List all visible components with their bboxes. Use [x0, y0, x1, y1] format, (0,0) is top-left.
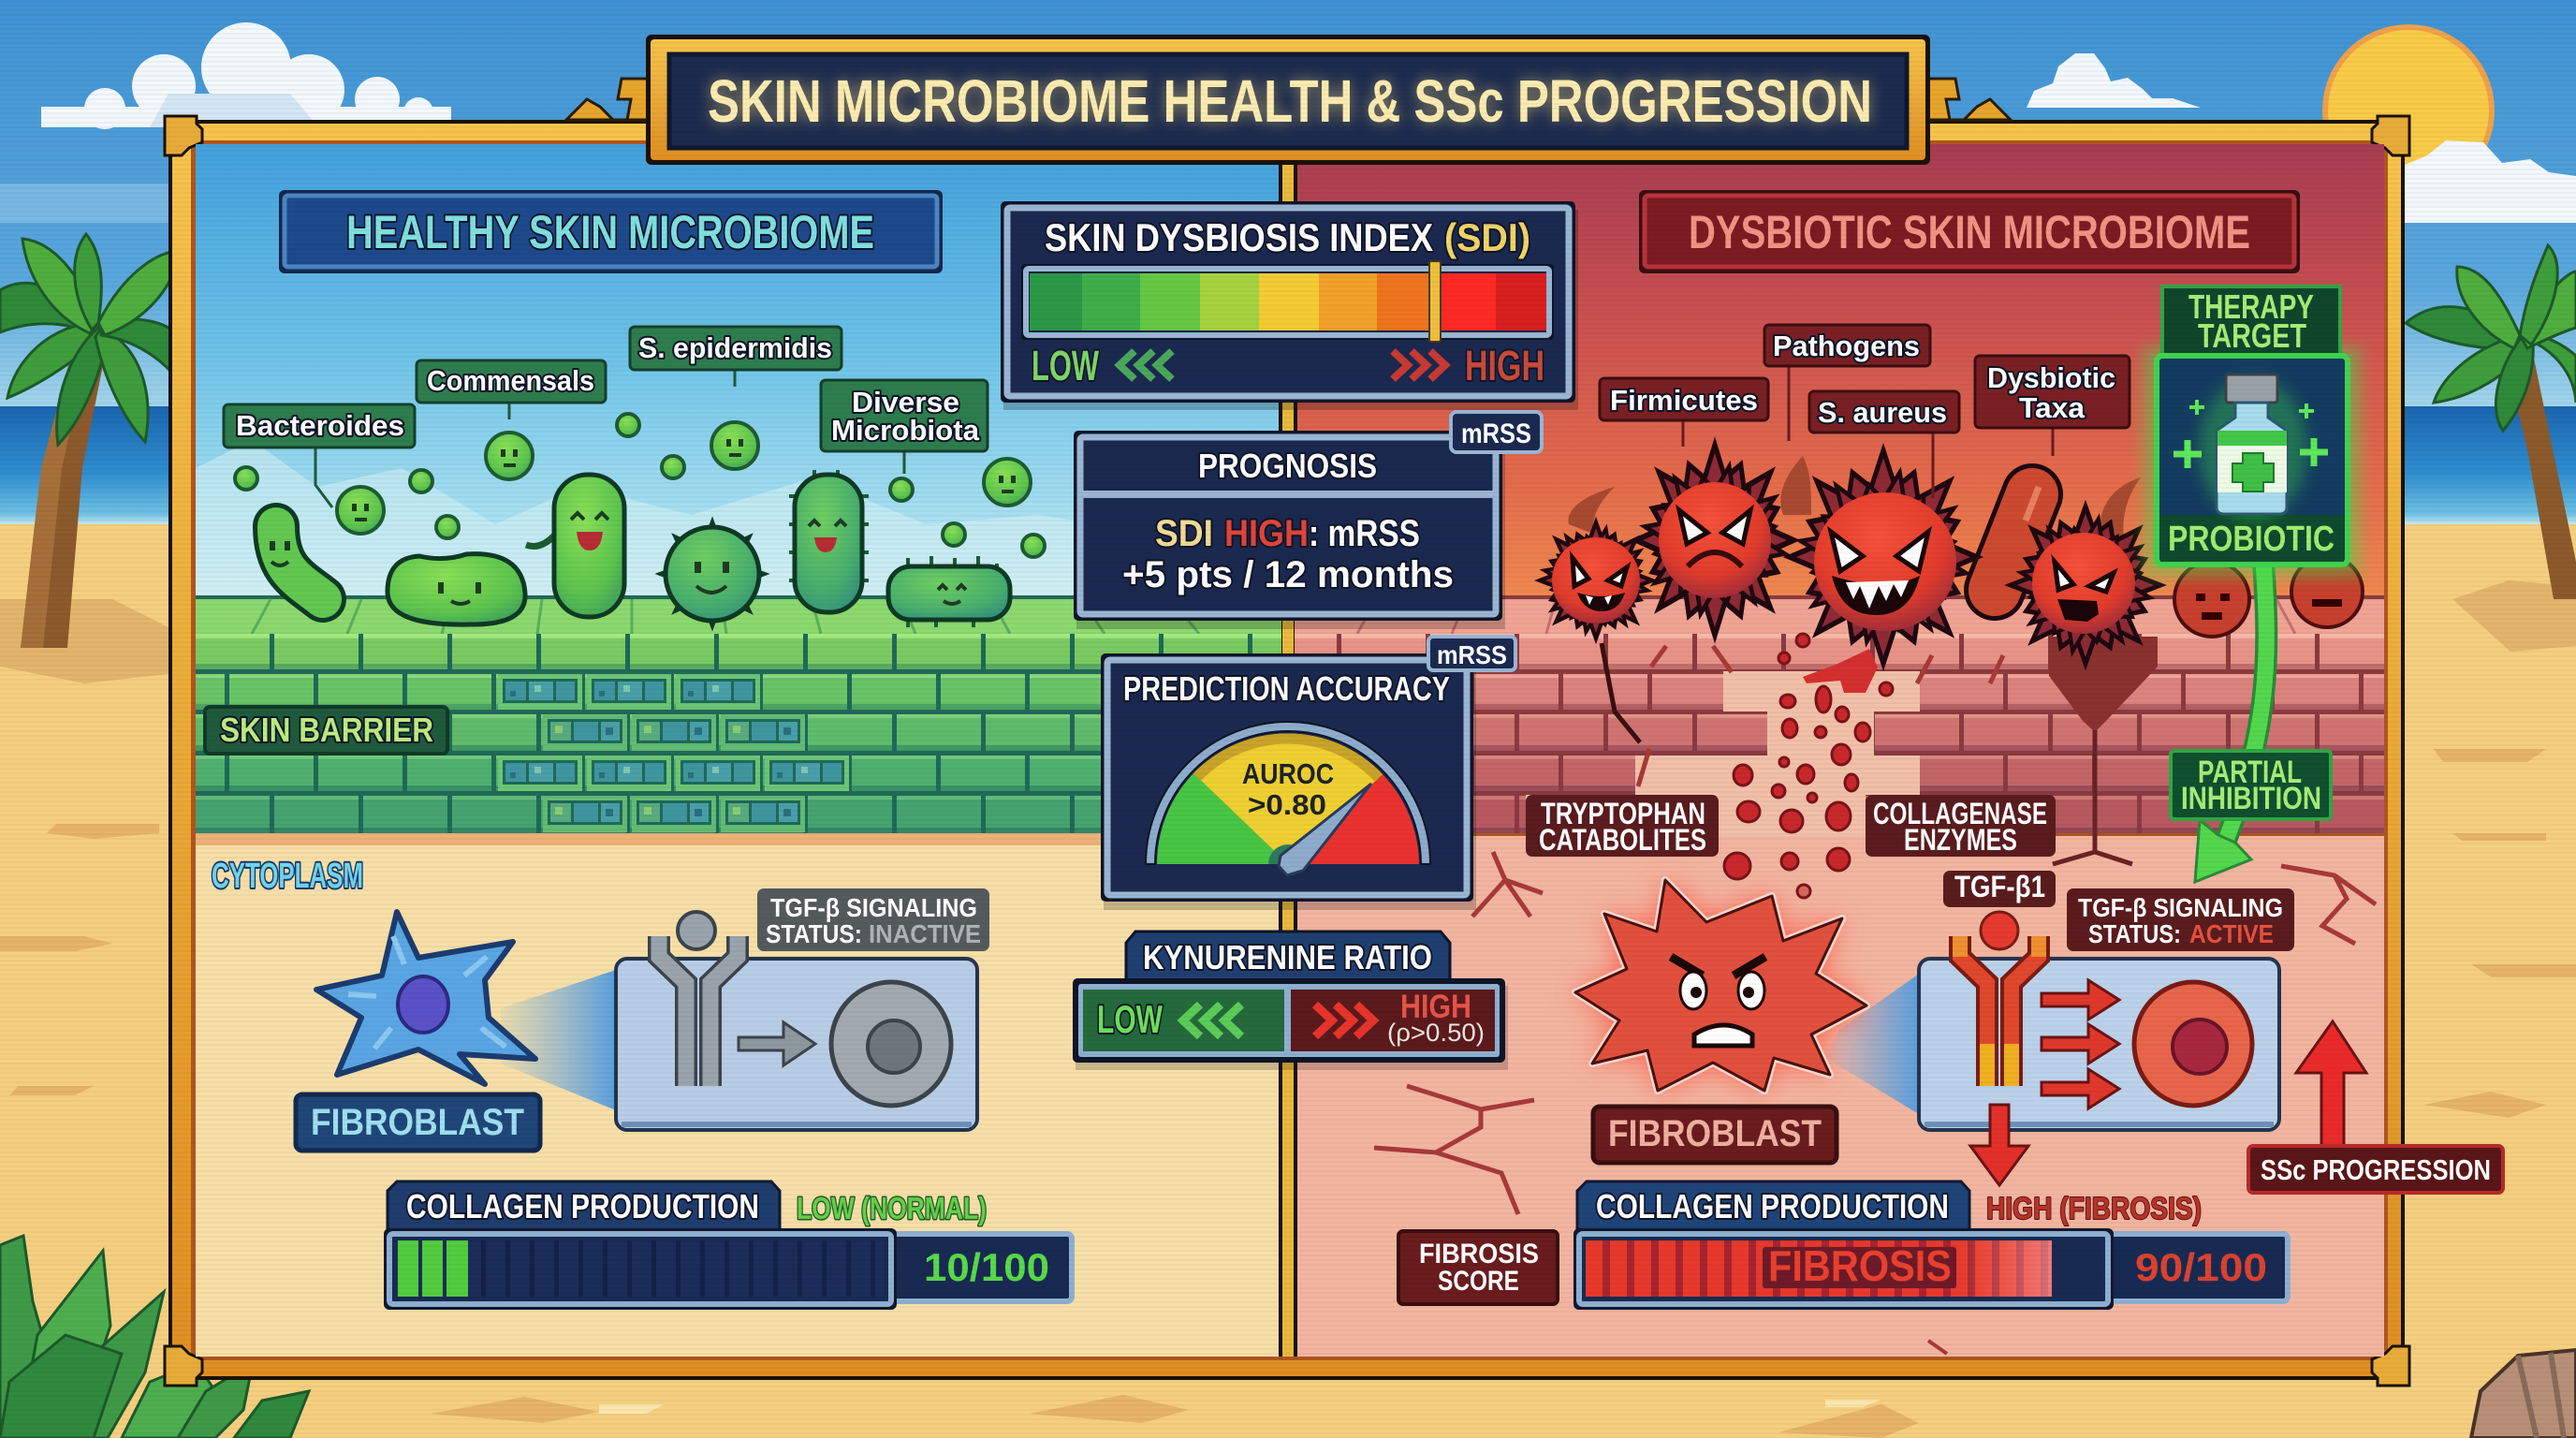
- cracks: [1374, 643, 2376, 1354]
- frame corner: bottom right: [2372, 1346, 2409, 1386]
- bacterium: bean: [388, 554, 525, 624]
- bush: lower left foliage: [0, 1236, 309, 1438]
- label: SSc progression: SSc PROGRESSION: [2261, 1153, 2491, 1186]
- label: collagenase enzymes: ENZYMES: [1904, 823, 2017, 857]
- panel: dysbiotic side background: [1295, 144, 2384, 1357]
- probiotic card: [2157, 356, 2348, 565]
- panel: kynurenine ratio: [1073, 932, 1508, 1070]
- palm tree: right: [2406, 245, 2576, 599]
- frame corner: top left: [165, 116, 202, 155]
- title banner: SKIN MICROBIOME HEALTH & SSc PROGRESSION: [708, 67, 1872, 135]
- label: partial inhibition: [2171, 751, 2331, 819]
- bacterium: round with knobs: [660, 521, 765, 626]
- heading: dysbiotic skin microbiome: [1639, 190, 2300, 273]
- high side: (ρ>0.50): [1387, 1019, 1485, 1047]
- zoom cone: healthy fibroblast: [501, 970, 616, 1110]
- status: TGF-beta inactive: INACTIVE: [869, 919, 981, 948]
- gauge marker: [1429, 261, 1441, 342]
- title banner: SKIN MICROBIOME HEALTH & SSc PROGRESSION: [708, 67, 1872, 135]
- chevrons: low: [1120, 351, 1172, 379]
- leader lines: healthy taxa: [315, 370, 904, 507]
- arrow: down to collagen: [1970, 1105, 2028, 1185]
- label: cytoplasm: CYTOPLASM: [212, 857, 363, 896]
- panel: prognosis: PROGNOSIS: [1198, 447, 1377, 485]
- cell: active: [2134, 982, 2252, 1106]
- center divider: [1279, 144, 1297, 1357]
- label: TGF-beta1: TGF-β1: [1954, 870, 2045, 903]
- fibrosis overlay: FIBROSIS: [1768, 1241, 1952, 1290]
- label: partial inhibition: PARTIAL: [2198, 755, 2302, 790]
- label: collagen production dysbiotic: [1577, 1181, 1969, 1232]
- pathogen: medium frowning: [1631, 445, 1799, 636]
- status: TGF-beta active: STATUS:: [2088, 919, 2181, 948]
- therapy target tag: TARGET: [2198, 316, 2306, 355]
- label: Firmicutes: Firmicutes: [1610, 384, 1758, 417]
- status: TGF-beta inactive: [757, 888, 989, 951]
- frame corner: bottom left: [165, 1346, 202, 1386]
- label: Diverse Microbiota: [821, 380, 988, 451]
- bar: collagen value dysbiotic: [1573, 1228, 2288, 1310]
- pathogen: large toothy: [1784, 450, 1983, 664]
- damaged brick patches: [493, 674, 849, 833]
- label: Dysbiotic Taxa: Dysbiotic: [1987, 361, 2115, 394]
- panel: kynurenine ratio: KYNURENINE RATIO: [1143, 938, 1432, 976]
- status: TGF-beta inactive: STATUS:: [766, 919, 862, 948]
- label: collagen production healthy: [388, 1181, 780, 1232]
- dark wall hole: [2049, 637, 2158, 732]
- panel: inactive signaling diagram: [616, 912, 977, 1130]
- gauge needle: [1279, 784, 1371, 875]
- label: tryptophan catabolites: CATABOLITES: [1539, 823, 1706, 857]
- cloud: lower right: [2405, 140, 2576, 223]
- status: TGF-beta active: ACTIVE: [2189, 919, 2274, 948]
- panel: prognosis: +5 pts / 12 months: [1122, 554, 1454, 595]
- label: tryptophan catabolites: TRYPTOPHAN: [1541, 797, 1705, 830]
- bacterium: capsule: [888, 556, 1010, 627]
- panel: skin dysbiosis index: [1001, 201, 1578, 410]
- pathogen: small left: [1534, 519, 1658, 642]
- label: Dysbiotic Taxa: [1975, 356, 2130, 428]
- heading: healthy skin microbiome: HEALTHY SKIN MICROBIOME: [346, 206, 874, 258]
- skin barrier: damaged brick wall: [1295, 595, 2384, 836]
- scroll ornament left: [566, 79, 650, 120]
- sparkles: [2174, 438, 2328, 468]
- label: fibrosis score: SCORE: [1438, 1266, 1519, 1297]
- label: fibrosis score: FIBROSIS: [1419, 1239, 1539, 1269]
- leader lines: dysbiotic taxa: [1683, 366, 2053, 498]
- chevrons: high: [1393, 351, 1445, 379]
- status: low normal: LOW (NORMAL): [797, 1191, 987, 1225]
- bar fill: red segments: [1586, 1240, 2052, 1297]
- panel: skin dysbiosis index: SKIN DYSBIOSIS INDEX: [1045, 215, 1433, 259]
- gauge: AUROC: [1146, 722, 1430, 875]
- icon: angry fibroblast: [1575, 880, 1866, 1091]
- bar: collagen value healthy: 10/100: [924, 1245, 1049, 1289]
- label: dysbiotic fibroblast: FIBROBLAST: [1608, 1113, 1822, 1154]
- pathogen: rod: [1995, 487, 2039, 590]
- label: Bacteroides: [224, 404, 415, 448]
- scroll ornament right: [1927, 79, 2011, 120]
- panel: healthy side background: [196, 144, 1281, 1357]
- icon: probiotic vial: [2199, 374, 2307, 521]
- main panel frame: [165, 116, 2409, 1386]
- status: TGF-beta active: [2067, 888, 2294, 951]
- high side: HIGH: [1400, 989, 1471, 1025]
- label: tryptophan catabolites: [1526, 795, 1719, 857]
- label: Bacteroides: Bacteroides: [236, 409, 404, 442]
- arrow: inactive: [739, 1022, 815, 1065]
- status: high fibrosis: HIGH (FIBROSIS): [1986, 1191, 2202, 1225]
- badge: mRSS: mRSS: [1461, 418, 1531, 449]
- panel: prognosis: [1074, 412, 1542, 629]
- label: collagenase enzymes: [1866, 795, 2056, 857]
- blood and metabolite droplets: [1724, 634, 1893, 898]
- icon: healthy fibroblast: [316, 912, 535, 1084]
- gauge bar: [1021, 264, 1554, 340]
- label: Diverse Microbiota: Diverse: [852, 386, 959, 418]
- bacterium: curved rod: [270, 526, 323, 599]
- bar: collagen value dysbiotic: 90/100: [2135, 1245, 2267, 1289]
- therapy target tag: THERAPY: [2188, 287, 2314, 326]
- label: Diverse Microbiota: Microbiota: [831, 414, 980, 447]
- receptor: active: [1960, 912, 2039, 1086]
- panel: prognosis: HIGH: [1224, 513, 1309, 554]
- cloud: upper right: [2027, 53, 2201, 108]
- badge: mRSS: [1451, 412, 1542, 452]
- bacterium: spiky rod: [789, 470, 869, 612]
- panel: prognosis: : mRSS: [1309, 513, 1420, 554]
- badge: mRSS: mRSS: [1437, 640, 1507, 669]
- status: TGF-beta inactive: TGF-β SIGNALING: [770, 893, 977, 922]
- label: collagenase enzymes: COLLAGENASE: [1873, 797, 2047, 830]
- gauge text: AUROC: [1242, 757, 1334, 790]
- panel: prognosis: SDI: [1155, 513, 1213, 554]
- label: Dysbiotic Taxa: Taxa: [2019, 391, 2086, 424]
- label: collagen production dysbiotic: COLLAGEN PRODUCTION: [1596, 1187, 1949, 1225]
- label: partial inhibition: INHIBITION: [2181, 781, 2321, 816]
- panel: skin dysbiosis index: HIGH: [1465, 342, 1544, 389]
- title banner: [566, 35, 2011, 165]
- high side: [1291, 989, 1495, 1051]
- zoom cone: dysbiotic fibroblast: [1825, 974, 1919, 1114]
- frame corner: top right: [2372, 116, 2409, 155]
- arrows: active: [2042, 980, 2119, 1108]
- heading: healthy skin microbiome: [279, 190, 943, 273]
- label: Firmicutes: [1600, 378, 1768, 420]
- palm tree: left: [0, 234, 183, 648]
- panel: prediction accuracy: PREDICTION ACCURACY: [1123, 669, 1450, 708]
- cell: inactive: [831, 982, 951, 1106]
- label: fibrosis score: [1398, 1231, 1558, 1304]
- label: collagen production healthy: COLLAGEN PRODUCTION: [406, 1187, 759, 1225]
- wall breach: [1526, 671, 1920, 836]
- pathogen: small background pair: [2174, 556, 2363, 637]
- bar: collagen value healthy: [384, 1228, 1072, 1310]
- skin barrier: healthy brick wall: [196, 595, 1281, 833]
- panel: active signaling diagram: [1919, 912, 2279, 1130]
- receptor: inactive: [659, 912, 738, 1086]
- panel: skin dysbiosis index: (SDI): [1444, 215, 1530, 259]
- sun: [2322, 24, 2495, 197]
- bar fill: three green segments: [398, 1240, 468, 1297]
- bacterium: tall rod: [526, 475, 624, 617]
- label: skin barrier: SKIN BARRIER: [220, 711, 433, 749]
- cloud: upper left: [41, 22, 451, 129]
- pathogen shadows: [1568, 456, 2141, 543]
- label: Commensals: Commensals: [427, 364, 594, 397]
- arrow: probiotic to TGF-beta inhibition: [2195, 562, 2266, 882]
- arrow: SSc progression up: [2296, 1021, 2366, 1152]
- pathogen: right snarling: [2009, 506, 2162, 664]
- label: Pathogens: Pathogens: [1773, 330, 1920, 362]
- therapy target tag: [2162, 286, 2340, 356]
- label: dysbiotic fibroblast: [1593, 1107, 1837, 1163]
- status: TGF-beta active: TGF-β SIGNALING: [2078, 893, 2283, 922]
- heading: dysbiotic skin microbiome: DYSBIOTIC SKIN MICROBIOME: [1689, 206, 2250, 258]
- label: healthy fibroblast: FIBROBLAST: [311, 1102, 524, 1143]
- label: healthy fibroblast: [296, 1094, 540, 1151]
- blood splash: [1803, 649, 1878, 693]
- low side: LOW: [1097, 997, 1163, 1041]
- panel: prediction accuracy: [1101, 637, 1515, 910]
- panel: skin dysbiosis index: LOW: [1032, 342, 1099, 389]
- label: SSc progression: [2248, 1146, 2503, 1193]
- label: S. epidermidis: S. epidermidis: [638, 331, 832, 364]
- callout: therapy target: [2144, 286, 2361, 577]
- label: S. aureus: [1809, 391, 1959, 433]
- low side: [1083, 990, 1284, 1051]
- callout: therapy target: PROBIOTIC: [2168, 520, 2334, 559]
- bacteria: small cocci and dots: [235, 414, 1045, 557]
- label: S. aureus: S. aureus: [1818, 396, 1947, 429]
- gauge: AUROC: >0.80: [1248, 788, 1326, 821]
- rock: lower right: [2471, 1350, 2576, 1438]
